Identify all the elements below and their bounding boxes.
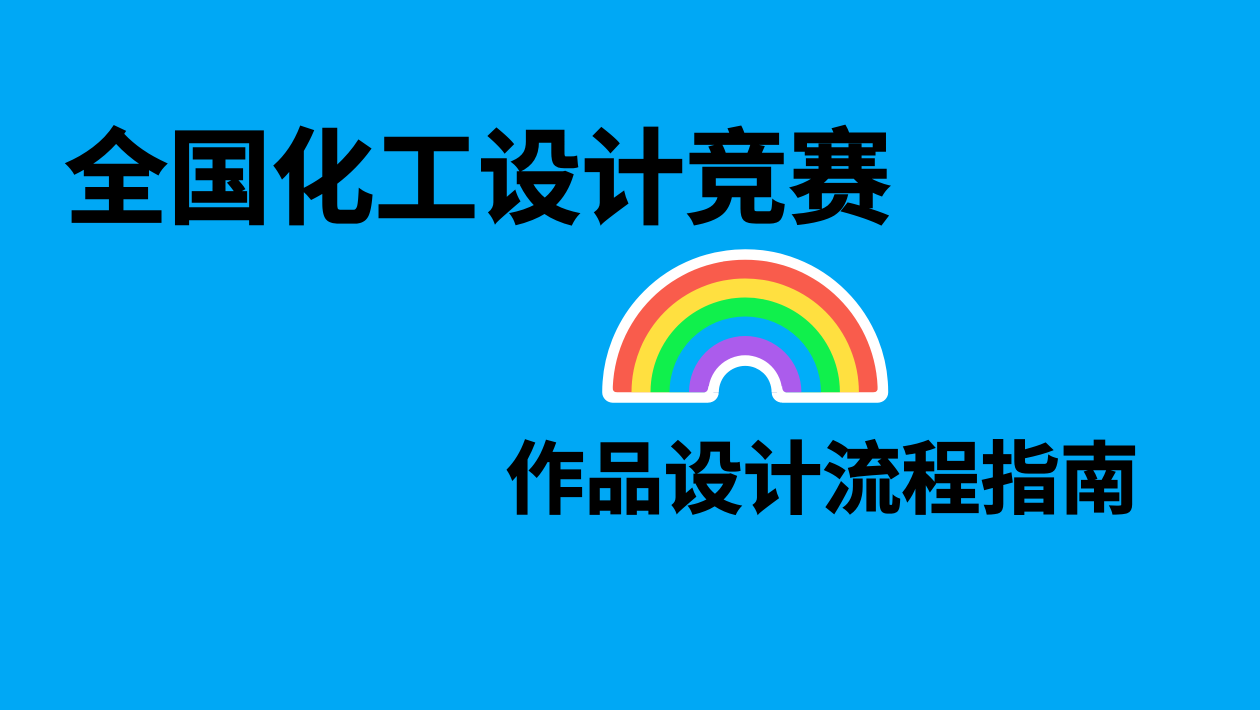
title: 全国化工设计竞赛: [64, 120, 892, 236]
subtitle: 作品设计流程指南: [506, 435, 1139, 524]
